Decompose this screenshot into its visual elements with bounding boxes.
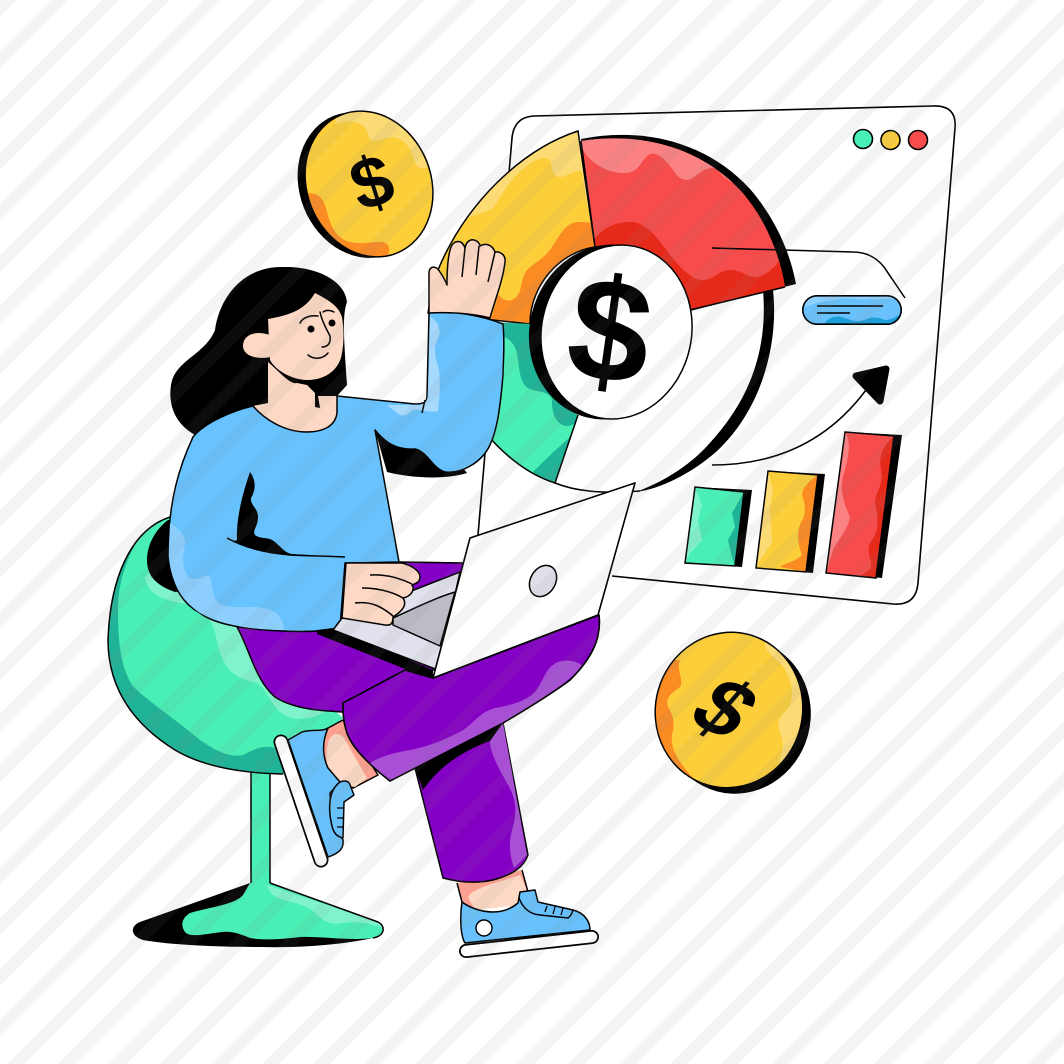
right ankle <box>457 870 528 910</box>
coin dollar sign: $ <box>672 662 777 756</box>
gauge thin lower edge <box>555 483 640 492</box>
lower leg <box>415 723 528 882</box>
laptop logo <box>524 560 562 602</box>
red segment <box>580 134 796 311</box>
chair shell <box>107 516 343 775</box>
person <box>168 240 592 951</box>
hair <box>170 267 347 436</box>
bar chart <box>685 432 902 578</box>
coin: bottom right <box>654 632 811 794</box>
raised hand <box>429 240 505 318</box>
label text lines <box>817 306 883 313</box>
sweater highlight <box>169 523 284 630</box>
eyes <box>308 320 336 332</box>
green segment <box>492 322 579 484</box>
coin: top left <box>298 110 434 258</box>
chair <box>100 500 383 947</box>
panel: browser window <box>478 106 955 604</box>
gauge dollar sign: $ <box>559 244 662 417</box>
laptop <box>317 483 635 781</box>
typing hand <box>342 563 420 625</box>
label pill <box>802 295 902 326</box>
neck <box>253 362 337 432</box>
face <box>243 293 344 380</box>
gauge black ring <box>636 290 774 492</box>
red bar <box>826 432 902 578</box>
sweater <box>168 312 504 632</box>
window control dots <box>854 130 928 150</box>
growth arrow <box>712 369 886 465</box>
gauge centre disc <box>511 228 708 436</box>
back thigh <box>237 562 465 712</box>
laptop screen <box>433 483 635 678</box>
front thigh <box>343 615 599 781</box>
keyboard deck <box>317 572 460 680</box>
raised sleeve highlight <box>387 316 440 416</box>
donut gauge chart <box>420 120 800 492</box>
coin dollar sign: $ <box>341 139 403 227</box>
left shoe <box>281 728 354 860</box>
chair base <box>133 883 383 947</box>
green bar <box>685 487 752 567</box>
ear <box>243 333 276 358</box>
left foot and ankle <box>281 720 378 860</box>
yellow segment <box>427 130 596 324</box>
shoe eyelet <box>476 920 492 936</box>
yellow bar <box>756 471 825 573</box>
leader line to label <box>712 248 905 298</box>
sweater fold shadow <box>228 472 327 556</box>
armpit shadow <box>375 430 467 477</box>
eyebrows, nose and smile <box>300 310 334 358</box>
chair stem <box>251 770 270 884</box>
right shoe <box>461 890 592 951</box>
